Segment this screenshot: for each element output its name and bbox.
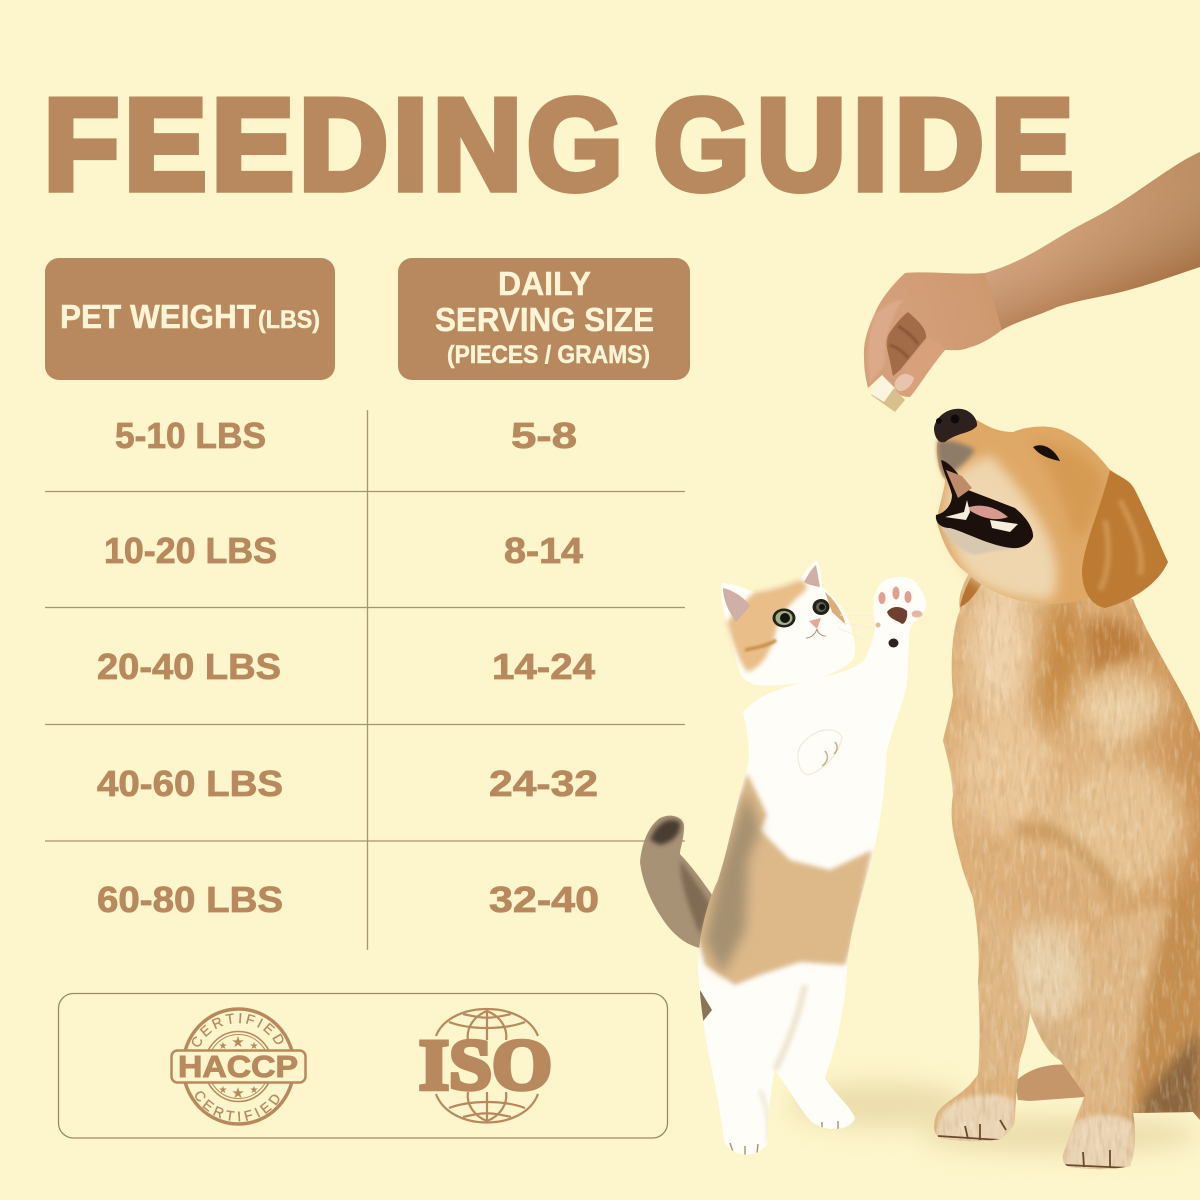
ground shadow [790,1083,1200,1153]
index finger highlight [868,300,903,383]
title: GUIDE [654,72,1073,217]
icon: ISO globe: ISO [419,1025,552,1105]
forehead shade [1030,440,1105,540]
header: daily serving size: (PIECES / GRAMS) [447,341,650,369]
table row: 20-40 lbs: 14-24 [492,646,595,687]
illustration: cat [640,560,926,1155]
mouth [936,460,1033,548]
table row: 40-60 lbs [97,763,598,804]
icon: ISO globe [419,1009,552,1122]
upper palate [946,470,972,498]
table row: 5-10 lbs: 5-10 LBS [115,415,266,456]
table row: 5-10 lbs [115,415,577,456]
arm and hand [864,152,1200,397]
raised arm and paw [863,577,926,700]
head [721,560,855,686]
lower jaw [936,517,1015,555]
body [934,560,1200,1169]
icon: HACCP badge: ★ [231,1084,245,1102]
table grid lines [45,410,685,950]
header: pet weight: (LBS) [258,306,320,334]
body fur shading [930,560,1200,1180]
table row: 60-80 lbs [97,879,599,920]
icon: HACCP badge: HACCP [178,1049,298,1084]
icon: HACCP badge: ★ [231,1033,245,1051]
muzzle highlight [945,455,1057,600]
icon: HACCP badge [170,1007,307,1126]
icon: HACCP badge: ★ [219,1041,228,1052]
tail [640,816,715,948]
table row: 5-10 lbs: 5-8 [511,415,577,456]
icon: HACCP badge: ★ [219,1085,228,1096]
thumb [895,338,945,397]
cat nose [809,618,821,629]
table row: 10-20 lbs: 8-14 [504,530,583,571]
eyes [772,599,830,628]
icon: HACCP badge: CERTIFIED [192,1013,284,1047]
whiskers [838,615,872,640]
head [937,420,1114,604]
table row: 60-80 lbs: 32-40 [489,879,599,920]
title [44,72,1073,217]
title: FEEDING [44,72,623,217]
muzzle grey [937,440,975,478]
treat cube [871,375,905,412]
table row: 60-80 lbs: 60-80 LBS [97,879,283,920]
table row: 20-40 lbs [97,646,595,687]
eye [1033,445,1060,461]
table row: 10-20 lbs [104,530,583,571]
icon: HACCP badge: ★ [250,1041,259,1052]
table row: 10-20 lbs: 10-20 LBS [104,530,277,571]
ear [1082,470,1168,608]
header: pet weight [45,258,335,380]
icon: HACCP badge: CERTIFIED [195,1091,280,1122]
certification panel [58,992,668,1139]
nose [934,409,977,442]
nostrils [936,414,960,424]
raised paw pads [876,586,922,648]
thumbnail [895,374,914,391]
head orange markings [727,580,807,672]
table row: 40-60 lbs: 40-60 LBS [97,763,283,804]
tongue [966,506,1008,519]
header: daily serving size [398,258,690,380]
table row: 40-60 lbs: 24-32 [489,763,598,804]
curled fingers [886,312,926,376]
mouth line [806,629,826,638]
header: daily serving size: DAILY [498,265,591,302]
body tabby patch [695,773,872,1155]
gap shadow behind legs [1018,1098,1085,1100]
ears inner [723,565,820,622]
lower front paw [798,730,842,775]
icon: HACCP badge: ★ [250,1085,259,1096]
body [698,627,910,1155]
neck tuft [960,570,985,607]
toe lines [822,742,837,766]
header: daily serving size: SERVING SIZE [435,301,654,338]
illustration: hand and arm with treat [864,152,1200,412]
table row: 20-40 lbs: 20-40 LBS [97,646,281,687]
illustration: dog [930,409,1200,1180]
hind foot [1015,1064,1085,1101]
header: pet weight: PET WEIGHT [60,298,256,335]
teeth [945,500,1018,532]
